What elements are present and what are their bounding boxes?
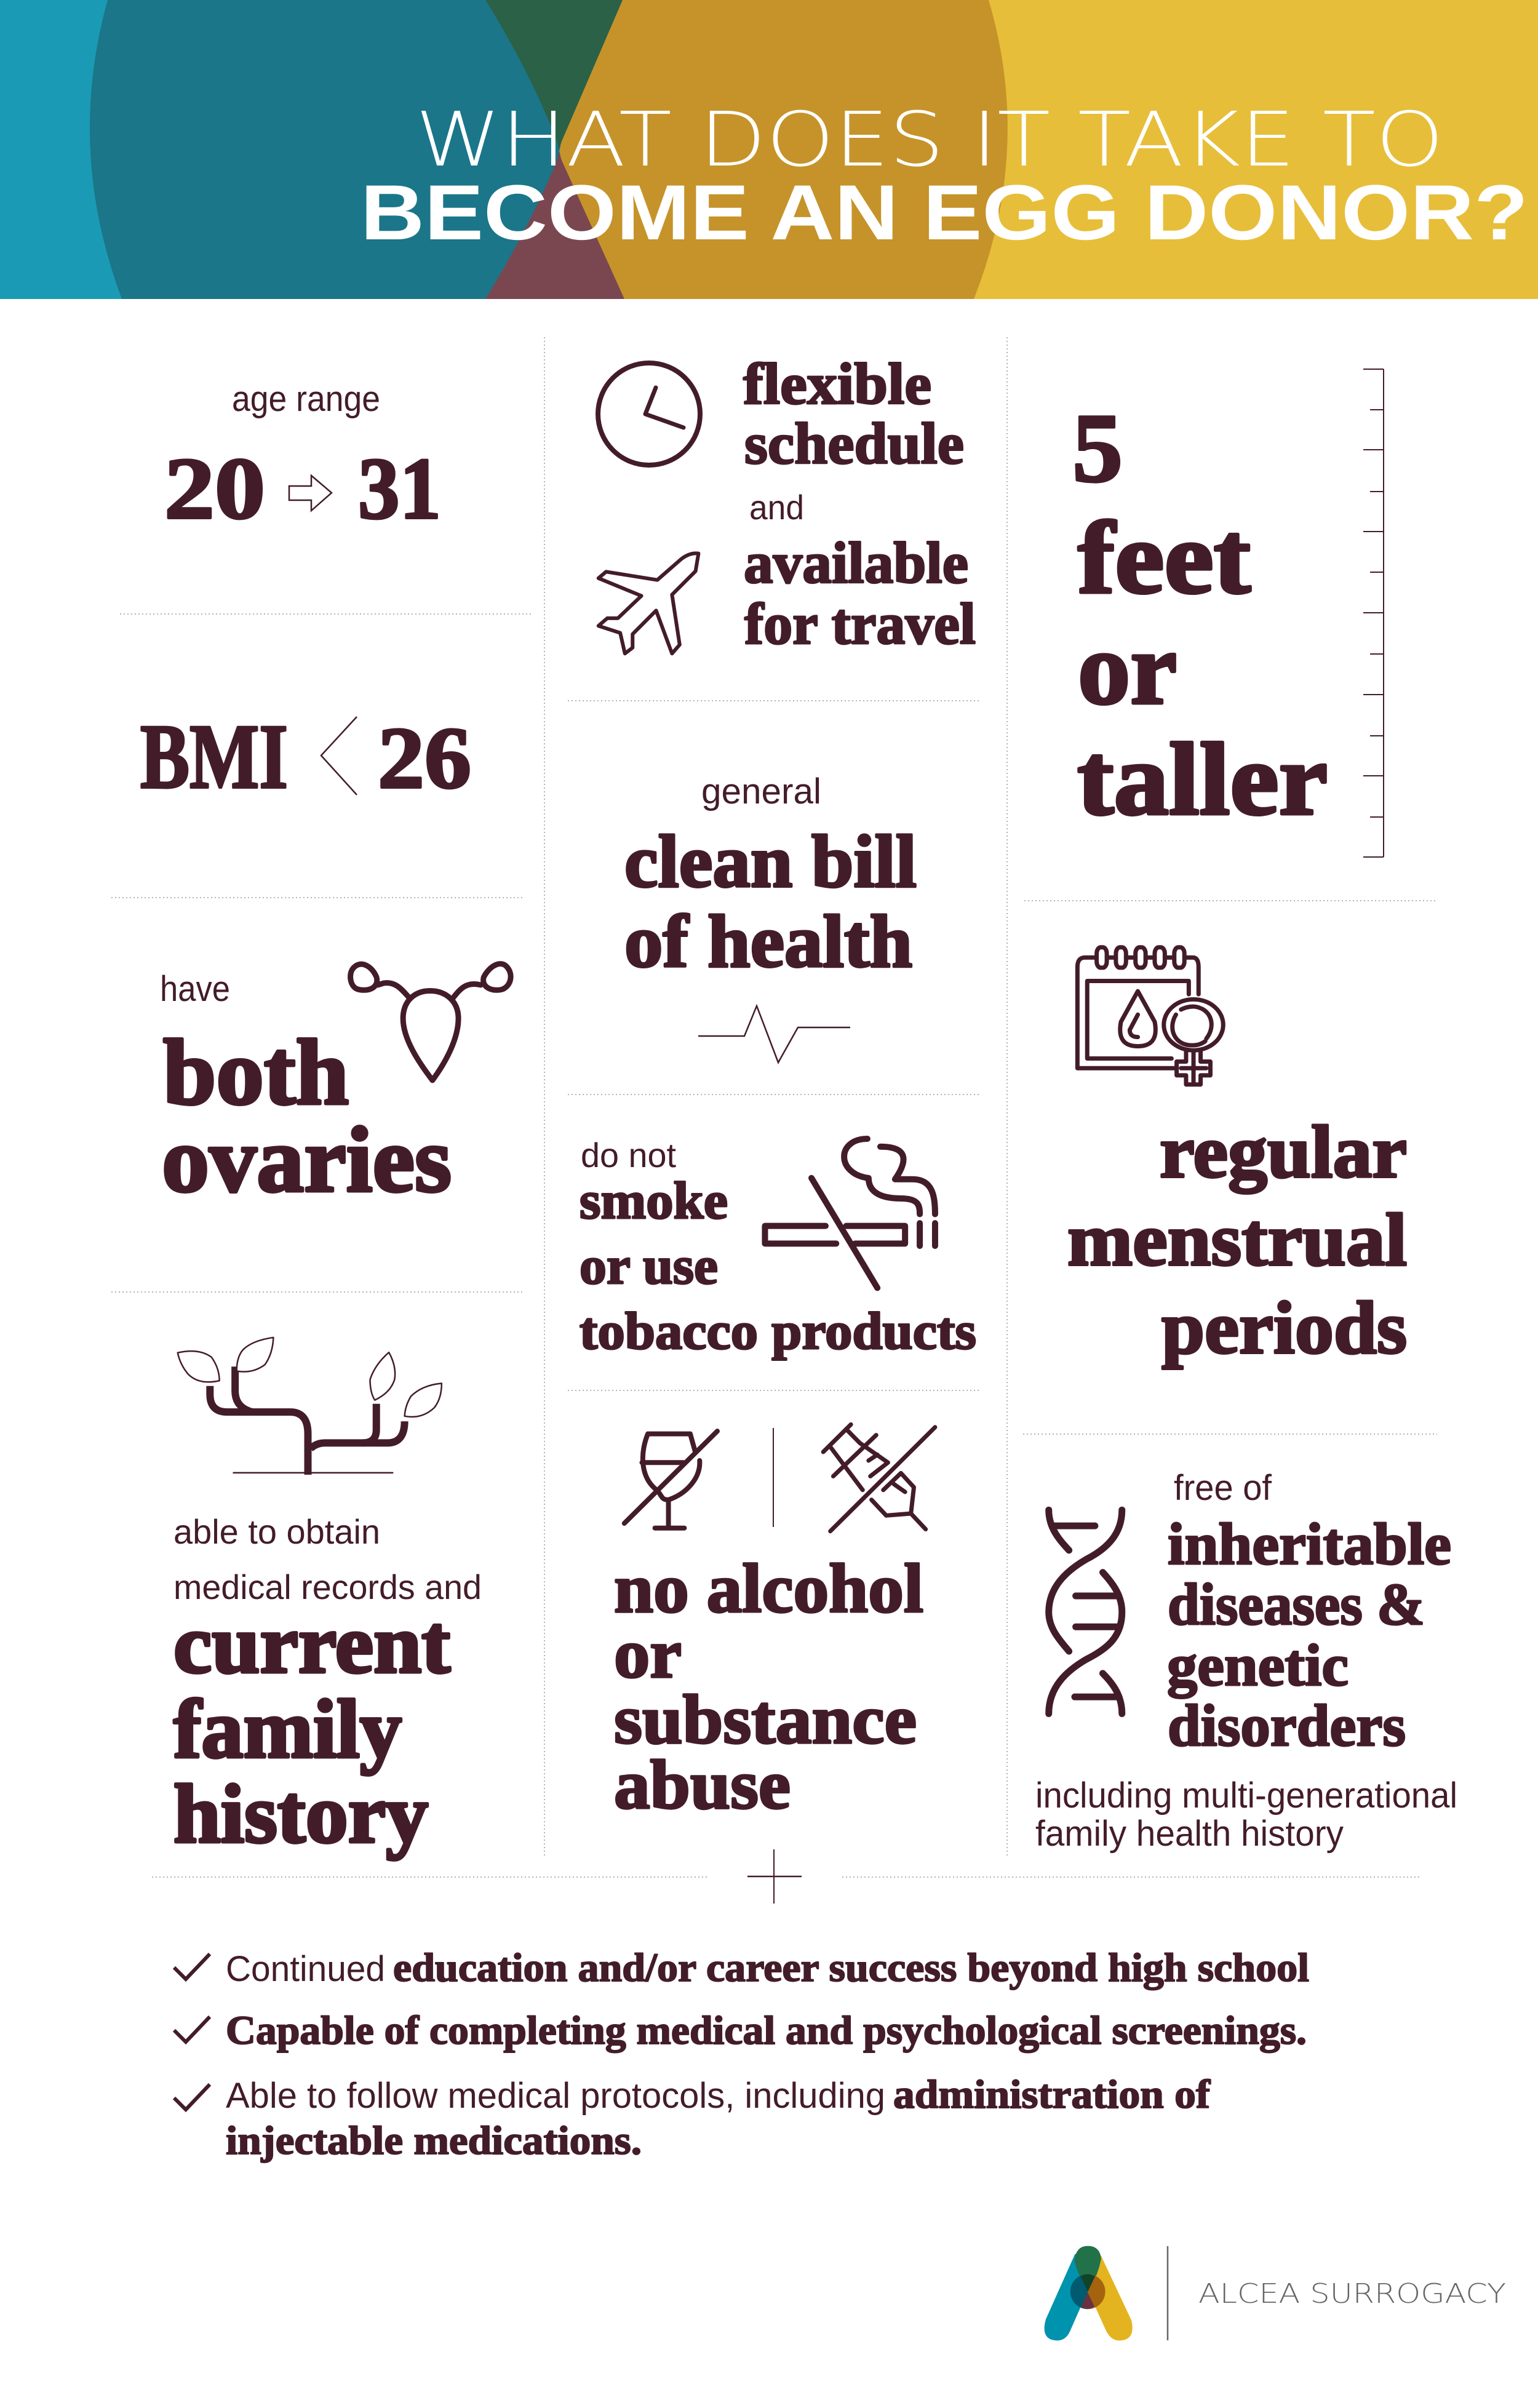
icon: no syringe xyxy=(823,1424,935,1531)
panel: medical records: family xyxy=(173,1683,402,1776)
panel: inheritable diseases: family health history xyxy=(1035,1814,1344,1854)
panel: no alcohol or substance abuse: no alcohol xyxy=(614,1550,923,1627)
bullet 1: education and/or career success beyond high school xyxy=(393,1945,1309,1990)
panel: regular menstrual periods xyxy=(1067,947,1407,1369)
logo separator xyxy=(1167,2246,1168,2340)
panel: both ovaries xyxy=(160,964,511,1211)
panel: flexible schedule and travel: flexible xyxy=(743,351,931,417)
panel: clean bill of health: clean bill xyxy=(624,820,917,903)
panel: height: 5 xyxy=(1072,393,1123,503)
bullet 1: Continued xyxy=(226,1949,385,1989)
panel: inheritable diseases: diseases & xyxy=(1168,1571,1425,1637)
panel: regular menstrual periods: menstrual xyxy=(1067,1198,1407,1282)
panel: both ovaries: have xyxy=(160,969,230,1009)
panel: age range: 20 xyxy=(164,440,265,537)
icon: calendar with female symbol xyxy=(1077,947,1223,1085)
panel: BMI: BMI xyxy=(140,706,288,808)
title: WHAT DOES IT TAKE TO xyxy=(415,96,1444,183)
panel: no smoking: or use xyxy=(580,1236,718,1295)
panel: flexible schedule and travel: schedule xyxy=(744,411,964,476)
icon: clock xyxy=(598,363,700,465)
panel: no smoking: tobacco products xyxy=(580,1301,976,1360)
panel: age range: age range xyxy=(232,379,380,419)
panel: regular menstrual periods: regular xyxy=(1160,1110,1407,1194)
bullet 2: Capable of completing medical and psychological screenings. xyxy=(226,2008,1307,2053)
bullet 3 xyxy=(174,2072,1211,2163)
panel: inheritable diseases: free of xyxy=(1174,1468,1272,1508)
logo wordmark: ALCEA SURROGACY xyxy=(1198,2278,1506,2310)
panel: medical records: able to obtain xyxy=(173,1512,380,1551)
panel: no smoking: smoke xyxy=(580,1171,728,1230)
panel: BMI: 26 xyxy=(378,709,471,807)
panel: age range: 31 xyxy=(358,440,441,537)
panel: age range xyxy=(164,379,441,537)
title xyxy=(361,96,1528,256)
panel: no alcohol or substance abuse: abuse xyxy=(614,1747,791,1824)
icon: no wine glass xyxy=(624,1431,717,1528)
panel: medical records: history xyxy=(173,1768,428,1860)
panel: regular menstrual periods: periods xyxy=(1161,1286,1407,1369)
panel: inheritable diseases: including multi-generational xyxy=(1035,1776,1457,1816)
panel: height: feet xyxy=(1078,501,1251,615)
panel: flexible schedule and travel: for travel xyxy=(744,591,976,656)
panel: clean bill of health: of health xyxy=(624,900,912,983)
panel: both ovaries: ovaries xyxy=(162,1108,452,1211)
icon: family tree xyxy=(178,1338,442,1475)
bullet 3: administration of xyxy=(893,2072,1211,2117)
icon: ruler xyxy=(1363,369,1384,857)
icon: no smoking xyxy=(765,1139,935,1288)
checklist xyxy=(174,1945,1309,2163)
panel: flexible schedule and travel xyxy=(598,351,976,656)
logo xyxy=(1045,2246,1506,2340)
panel: flexible schedule and travel: available xyxy=(744,530,968,596)
panel: no smoking xyxy=(580,1136,976,1360)
bullet 3: injectable medications. xyxy=(226,2118,642,2163)
panel: inheritable diseases: genetic xyxy=(1167,1632,1349,1698)
panel: height: or xyxy=(1078,612,1177,726)
icon: airplane xyxy=(599,553,698,653)
panel: inheritable diseases xyxy=(1035,1468,1457,1854)
header banner xyxy=(0,0,1538,299)
panel: no alcohol or substance abuse: or xyxy=(614,1616,682,1692)
panel: height xyxy=(1072,369,1384,857)
panel: no alcohol or substance abuse xyxy=(614,1424,935,1824)
panel: clean bill of health xyxy=(624,771,917,1062)
bullet 3: Able to follow medical protocols, including xyxy=(226,2076,885,2116)
icon: less than xyxy=(321,717,357,795)
column and row dividers xyxy=(111,337,1437,1877)
plus horizontal bar xyxy=(747,1876,802,1877)
panel: both ovaries: both xyxy=(163,1021,349,1124)
icon: uterus xyxy=(351,964,511,1080)
panel: medical records: current xyxy=(173,1598,450,1691)
panel: inheritable diseases: inheritable xyxy=(1168,1511,1451,1577)
icon: DNA helix xyxy=(1049,1510,1122,1713)
separator xyxy=(773,1428,774,1527)
panel: inheritable diseases: disorders xyxy=(1168,1692,1406,1758)
icon: pulse line xyxy=(698,1006,850,1062)
panel: height: taller xyxy=(1077,722,1328,837)
panel: flexible schedule and travel: and xyxy=(749,488,804,527)
panel: clean bill of health: general xyxy=(701,771,821,811)
icon: plus xyxy=(773,1849,775,1904)
panel: no alcohol or substance abuse: substance xyxy=(614,1681,917,1758)
panel: medical records xyxy=(173,1338,482,1860)
title: BECOME AN EGG DONOR? xyxy=(361,169,1528,256)
icon: arrow xyxy=(289,476,332,511)
logo mark xyxy=(1045,2246,1133,2340)
panel: medical records: medical records and xyxy=(173,1568,482,1606)
panel: BMI xyxy=(140,706,471,808)
panel: no smoking: do not xyxy=(581,1136,676,1174)
